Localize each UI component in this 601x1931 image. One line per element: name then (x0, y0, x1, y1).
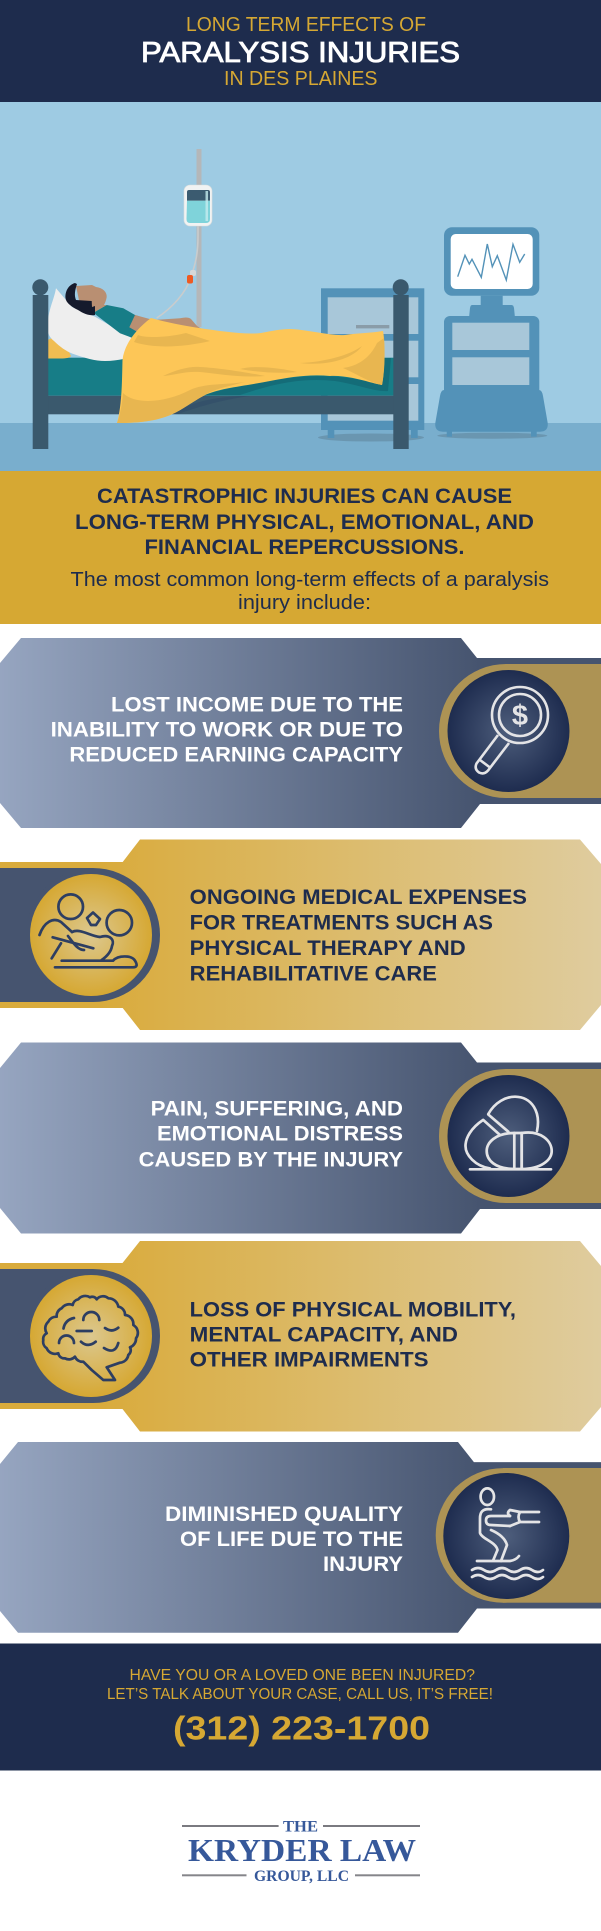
blanket (117, 318, 391, 423)
bed (32, 279, 409, 449)
text: medical expenses: PHYSICAL THERAPY AND (190, 937, 466, 960)
text: quality of life: OF LIFE DUE TO THE (180, 1528, 403, 1551)
header (0, 0, 601, 102)
text: loss of mobility: LOSS OF PHYSICAL MOBILITY, (190, 1299, 516, 1322)
icon: water skier (472, 1488, 543, 1579)
text: quality of life (165, 1503, 403, 1576)
IV pole and bag (157, 149, 212, 327)
text: quality of life: DIMINISHED QUALITY (165, 1503, 403, 1526)
header line: long term effects: LONG TERM EFFECTS OF (186, 14, 426, 36)
shirt (93, 305, 150, 340)
footer question: HAVE YOU OR A LOVED ONE BEEN INJURED? (130, 1667, 475, 1684)
panel: intro (0, 471, 601, 624)
text: lost income (51, 694, 403, 767)
intro body (70, 569, 549, 614)
text: medical expenses: ONGOING MEDICAL EXPENSES (190, 886, 527, 909)
text: medical expenses (190, 886, 527, 986)
text: quality of life: INJURY (323, 1553, 403, 1576)
panel: lost income (0, 638, 601, 828)
intro body: injury include: (238, 592, 371, 614)
intro heading (75, 485, 534, 559)
title: PARALYSIS INJURIES (141, 37, 460, 69)
text: loss of mobility (190, 1299, 516, 1372)
bed posts (33, 295, 48, 449)
logo: THE (283, 1819, 318, 1836)
panel: quality of life (0, 1442, 601, 1633)
text: medical expenses: REHABILITATIVE CARE (190, 963, 437, 986)
panel: loss of mobility (0, 1241, 601, 1432)
footer call to action (0, 1644, 601, 1770)
logo: GROUP, LLC (254, 1868, 349, 1885)
patient (65, 283, 210, 340)
hair and beard (65, 283, 95, 315)
text: loss of mobility: OTHER IMPAIRMENTS (190, 1349, 428, 1372)
header line: location: IN DES PLAINES (224, 68, 378, 90)
panel: pain and suffering (0, 1042, 601, 1234)
text: lost income: REDUCED EARNING CAPACITY (69, 744, 403, 767)
nightstand (318, 288, 424, 442)
footer invitation: LET’S TALK ABOUT YOUR CASE, CALL US, IT’S FREE! (107, 1686, 493, 1703)
illustration: hospital room (0, 102, 601, 471)
text: lost income: LOST INCOME DUE TO THE (111, 694, 403, 717)
pillow (48, 338, 71, 358)
text: pain and suffering (139, 1098, 403, 1172)
text: lost income: INABILITY TO WORK OR DUE TO (51, 719, 403, 742)
intro body: The most common long-term effects of a paralysis (70, 569, 549, 591)
intro heading: LONG-TERM PHYSICAL, EMOTIONAL, AND (75, 511, 534, 534)
icon: magnifying glass with dollar (476, 687, 548, 773)
icon: magnifying glass with dollar: $ (512, 700, 528, 732)
logo (182, 1819, 420, 1885)
panel: medical expenses (0, 840, 601, 1030)
text: pain and suffering: EMOTIONAL DISTRESS (157, 1123, 403, 1146)
face (76, 285, 107, 313)
text: loss of mobility: MENTAL CAPACITY, AND (190, 1324, 458, 1347)
arm (129, 315, 210, 340)
text: pain and suffering: CAUSED BY THE INJURY (139, 1149, 403, 1172)
intro heading: FINANCIAL REPERCUSSIONS. (144, 536, 464, 559)
logo: KRYDER LAW (188, 1832, 416, 1868)
icon: physical therapy (40, 894, 137, 967)
phone number: (312) 223-1700 (173, 1709, 430, 1746)
icon: brain (43, 1296, 138, 1380)
icon: pills (466, 1097, 552, 1169)
text: medical expenses: FOR TREATMENTS SUCH AS (190, 911, 493, 934)
text: pain and suffering: PAIN, SUFFERING, AND (151, 1098, 403, 1121)
intro heading: CATASTROPHIC INJURIES CAN CAUSE (97, 485, 512, 508)
medical monitor (435, 227, 548, 439)
